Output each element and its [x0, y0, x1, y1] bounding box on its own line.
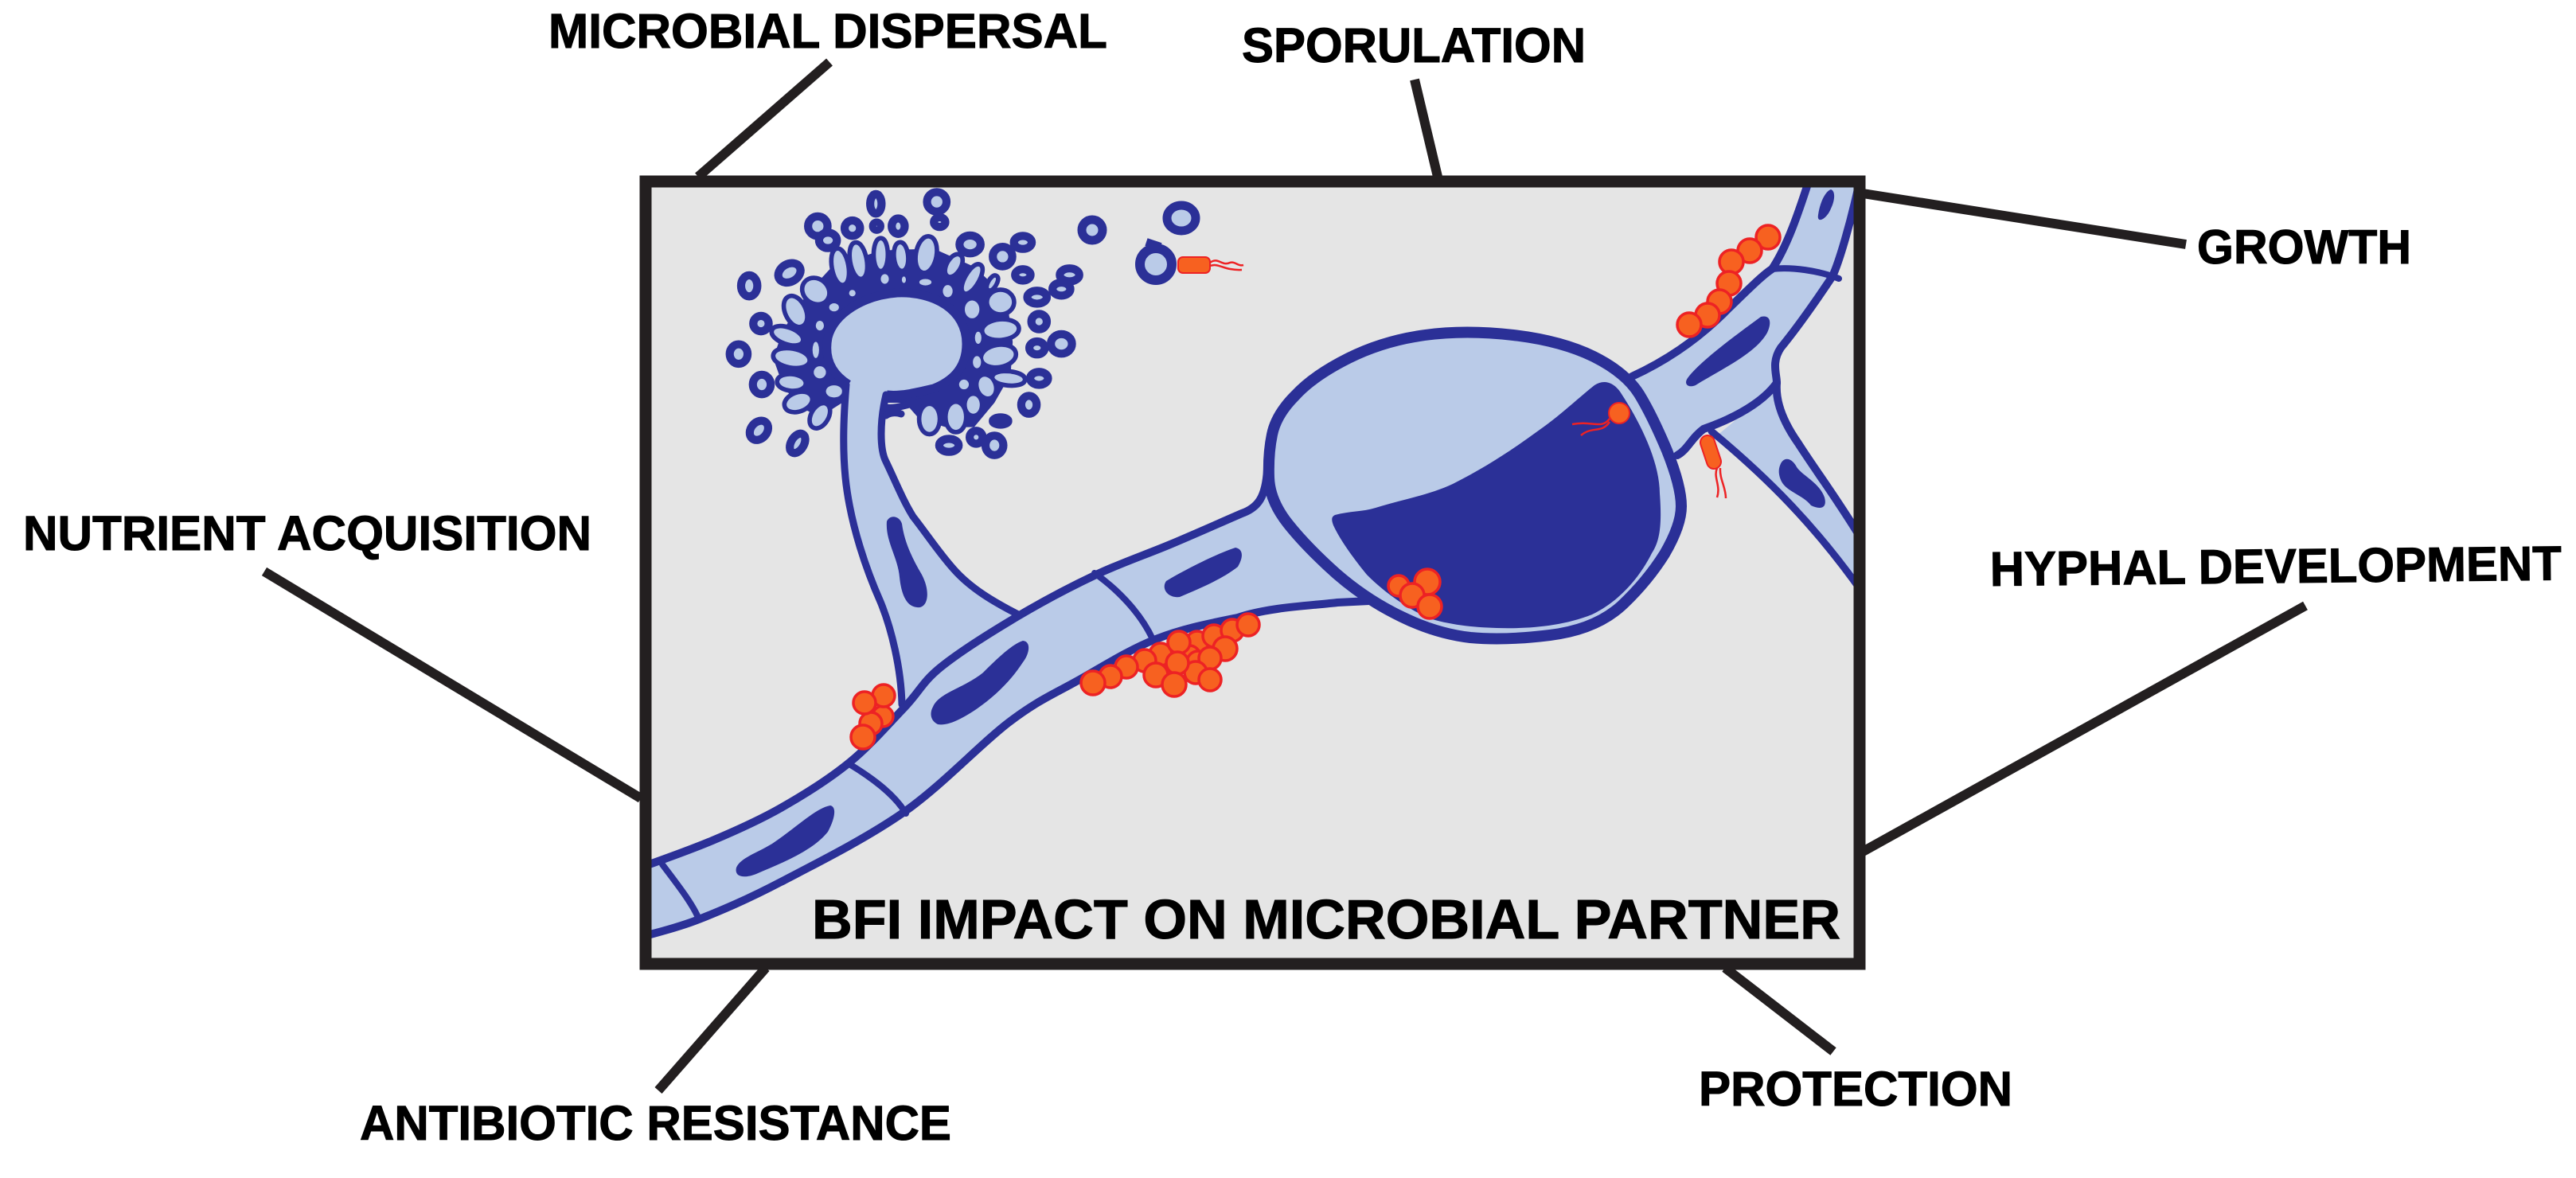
- panel title: BFI IMPACT ON MICROBIAL PARTNER: [812, 888, 1840, 950]
- bacterium on hypha branch: [1708, 443, 1726, 498]
- bacterium entering swollen cell: [1572, 403, 1630, 435]
- stalk and hypha fills: [645, 181, 1863, 936]
- label: growth: GROWTH: [2197, 220, 2411, 274]
- bacteria clusters: [851, 225, 1780, 749]
- bacterium with flagella near spore: [1178, 257, 1243, 273]
- cluster inside swollen cell: [1388, 569, 1442, 618]
- label: nutrient acquisition: NUTRIENT ACQUISITION: [23, 506, 591, 560]
- free spores: [1082, 205, 1196, 280]
- cluster on stalk base: [851, 685, 895, 749]
- hypha outlines and septa: [645, 181, 1863, 936]
- vesicle: [831, 297, 962, 392]
- label: microbial dispersal: MICROBIAL DISPERSAL: [548, 4, 1107, 58]
- illustration: fungal hypha with bacteria: [645, 181, 1863, 936]
- large swollen cell: [1269, 333, 1681, 638]
- conidia head: [730, 192, 1079, 456]
- label: sporulation: SPORULATION: [1242, 18, 1586, 72]
- dark interior of swollen cell: [1332, 382, 1661, 628]
- label: antibiotic resistance: ANTIBIOTIC RESISTANCE: [360, 1096, 951, 1150]
- panel: frame background: [646, 181, 1860, 964]
- label: protection: PROTECTION: [1699, 1062, 2012, 1116]
- panel frame: [646, 181, 1860, 964]
- leader lines connecting labels to the frame: [264, 62, 2305, 1090]
- chain on upper right hypha: [1677, 225, 1780, 337]
- cluster under hypha: [1081, 614, 1259, 696]
- label: hyphal development: HYPHAL DEVELOPMENT: [1989, 536, 2562, 596]
- nuclei: [736, 189, 1834, 876]
